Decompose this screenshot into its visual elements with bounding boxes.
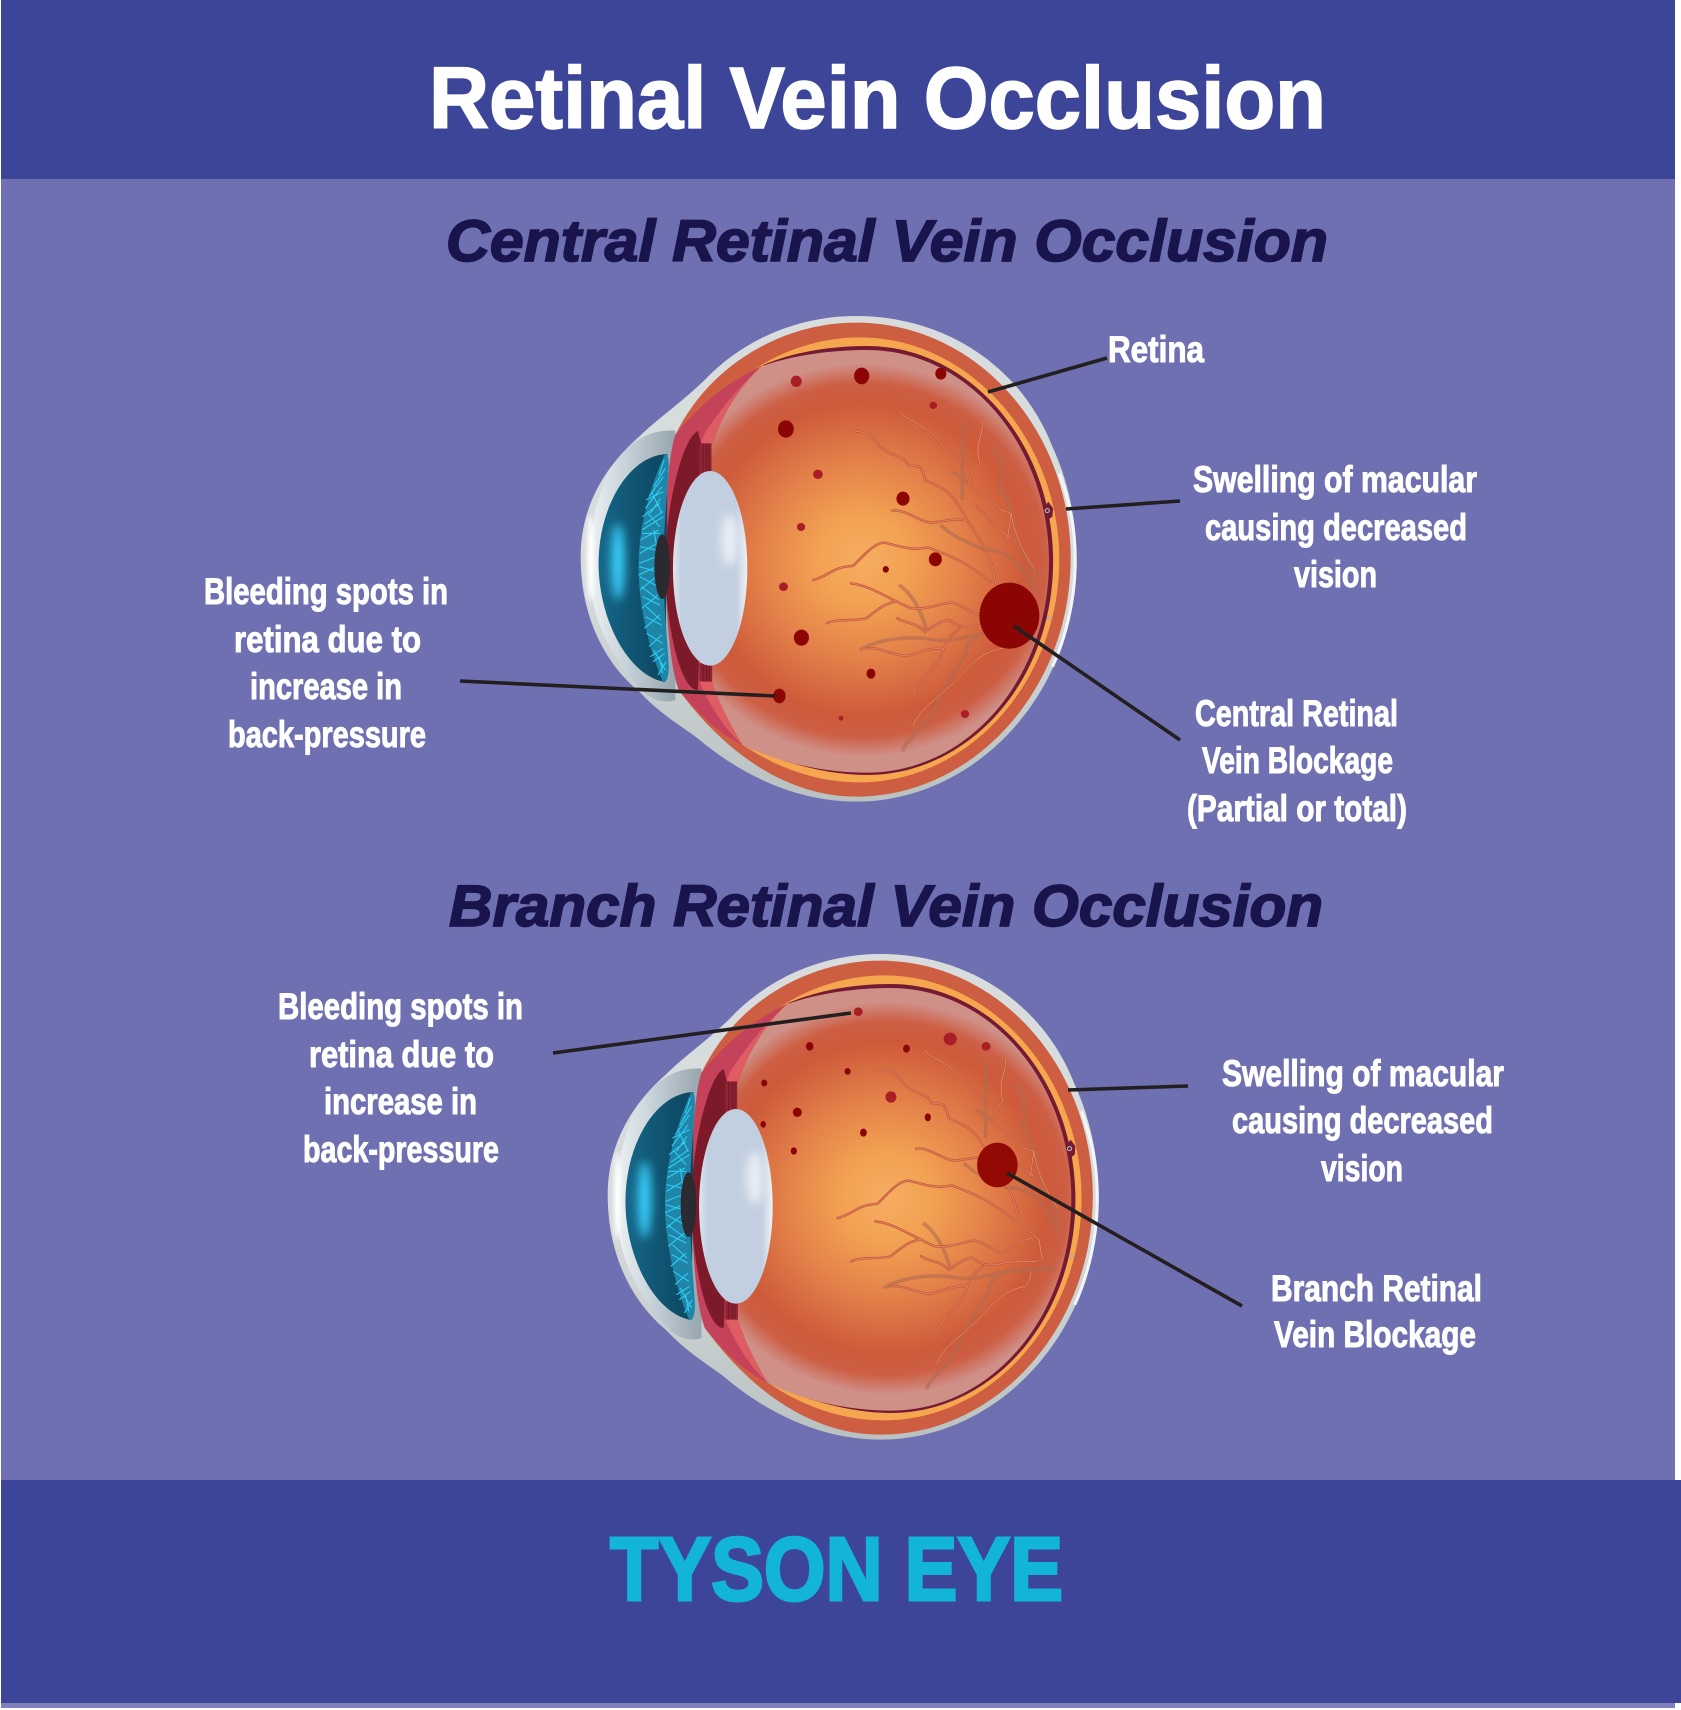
label: central retinal vein blockage: Vein Blockage	[1202, 740, 1393, 781]
label: bleeding spots, central	[204, 571, 448, 755]
label: branch retinal vein blockage: Branch Retinal	[1271, 1268, 1482, 1309]
label: bleeding spots, central: increase in	[250, 666, 402, 707]
logo: Tyson Eye: TYSON EYE	[610, 1520, 1063, 1620]
callout line: bleeding spots, branch	[553, 1013, 851, 1053]
callout line: retina	[988, 358, 1107, 392]
footer band	[1, 1480, 1681, 1703]
label: bleeding spots, central: back-pressure	[228, 714, 426, 755]
label: swelling of macular: Swelling of macular	[1193, 459, 1477, 500]
heading: branch retinal vein occlusion: Branch Retinal Vein Occlusion	[449, 874, 1323, 939]
callout line: bleeding spots, central	[460, 681, 775, 696]
label: branch retinal vein blockage: Vein Blockage	[1274, 1314, 1476, 1355]
label: swelling of macular	[1193, 459, 1477, 595]
label: central retinal vein blockage	[1187, 693, 1407, 829]
label: swelling of macular, branch	[1222, 1053, 1504, 1189]
header band	[1, 0, 1675, 179]
label: bleeding spots, branch: retina due to	[309, 1034, 494, 1075]
label: swelling of macular, branch: Swelling of macular	[1222, 1053, 1504, 1094]
label: branch retinal vein blockage	[1271, 1268, 1482, 1355]
callout line: branch retinal vein blockage	[1007, 1173, 1242, 1306]
label: bleeding spots, central: Bleeding spots in	[204, 571, 448, 612]
heading: central retinal vein occlusion: Central Retinal Vein Occlusion	[446, 209, 1328, 274]
callout line: swelling of macular, branch	[1068, 1086, 1188, 1090]
label: bleeding spots, branch: back-pressure	[303, 1129, 499, 1170]
callout line: swelling of macular	[1066, 501, 1180, 509]
label: swelling of macular: causing decreased	[1205, 507, 1467, 548]
label: bleeding spots, branch	[278, 986, 523, 1170]
eye diagram: central retinal vein occlusion	[581, 316, 1077, 802]
label: swelling of macular, branch: causing decreased	[1232, 1100, 1493, 1141]
title: Retinal Vein Occlusion	[429, 50, 1326, 147]
label: swelling of macular, branch: vision	[1321, 1148, 1403, 1189]
eye diagram: branch retinal vein occlusion	[608, 954, 1099, 1440]
callout line: central retinal vein blockage	[1014, 626, 1180, 740]
label: central retinal vein blockage: (Partial or total)	[1187, 788, 1407, 829]
label: bleeding spots, central: retina due to	[234, 619, 421, 660]
background panel	[1, 179, 1675, 1480]
label: retina: Retina	[1108, 329, 1204, 370]
label: swelling of macular: vision	[1294, 554, 1377, 595]
label: bleeding spots, branch: Bleeding spots in	[278, 986, 523, 1027]
label: central retinal vein blockage: Central Retinal	[1195, 693, 1398, 734]
label: bleeding spots, branch: increase in	[324, 1081, 477, 1122]
